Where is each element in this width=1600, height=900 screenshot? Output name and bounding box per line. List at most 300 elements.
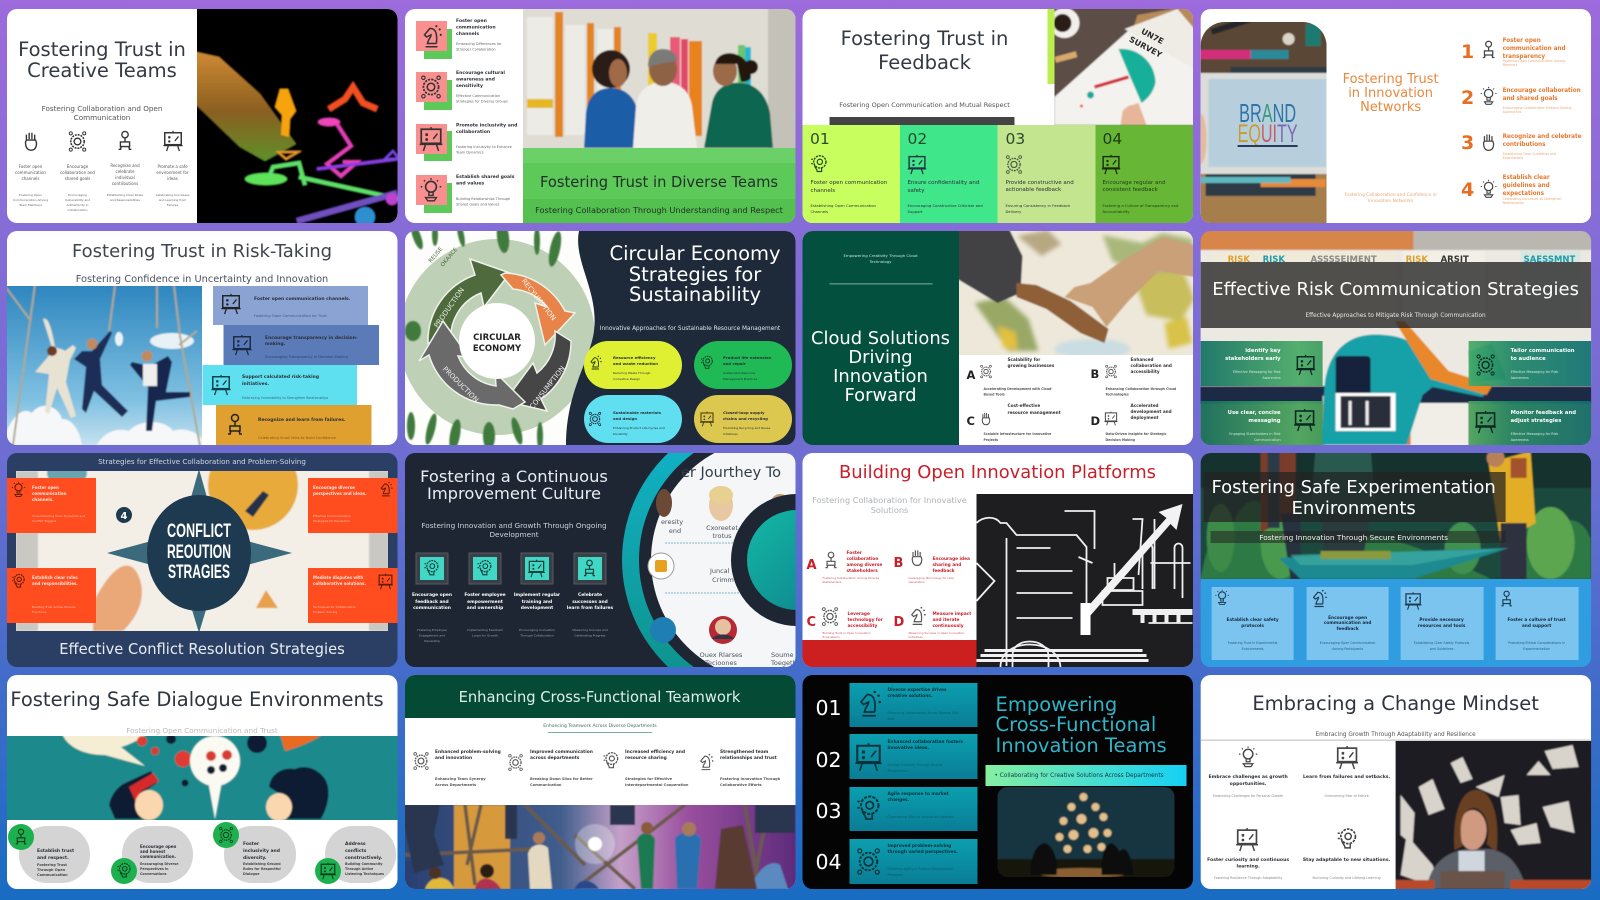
image: conflict resolution compass: CONFLICT [167,521,231,542]
four icon columns: contributions [112,181,138,186]
items A to D: growing businesses [1008,363,1055,368]
title: Feedback [878,51,972,74]
diagram: journey image in ring [622,413,916,707]
step 2: Encouraging Transparency in Decision-Making [265,355,348,359]
box: monitor feedback: adjust strategies [1511,418,1561,424]
pill 3: Sustainable materials [613,410,662,415]
step 3 [202,365,357,405]
items A to D: accessibility [848,623,878,629]
numbered list: communication and [1503,46,1566,52]
box: foster communication: communication [32,491,67,496]
box: diverse perspectives: Effective Communication [313,514,351,518]
numbered column 04: consistent feedback [1102,187,1159,193]
title: Fostering Trust in [18,38,186,61]
items A to D: Cost-effective [1008,403,1040,408]
card 1: Fostering Trust in Experimental [1228,641,1278,645]
image: conflict resolution compass: REOUTION [167,542,231,563]
subtitle [42,106,162,120]
card 2 [1307,587,1389,660]
left green title panel: Technology [869,259,892,264]
pill 2: communication. [140,854,176,859]
numbered column 03: Delivery [1006,209,1022,214]
items A to D: technology for [848,617,884,623]
image: survey on clipboard [1054,9,1193,125]
box: clear roles: Building Trust Across Diverse [32,605,76,609]
diagram: journey image in ring: Soume [771,651,794,659]
subtitle: Fostering Collaboration and Open [42,104,162,113]
step 2: Encourage transparency in decision- [265,335,358,341]
numbered column 02: 02 [908,130,927,148]
pill 1: and respect. [37,855,69,861]
card 3: Establishing Clear Safety Protocols [1414,641,1470,645]
card 4: Foster a culture of trust [1508,617,1566,623]
feature grid: Learn from failures and setbacks. [1303,774,1390,780]
box: mediate disputes [308,568,398,623]
box: mediate disputes: collaborative solutions. [313,581,366,586]
feature columns: and innovation [435,755,472,761]
panel: Fostering Trust in Feedback [802,4,1198,223]
pill 2: Management Practices [723,377,758,381]
feature columns: Breaking Down Silos for Better [530,777,593,781]
subtitle: Fostering Open Communication and Trust [126,726,278,735]
feature columns: Strengthened team [720,749,769,755]
four icon columns: celebrate [116,169,135,174]
diagram: journey image in ring: eresity [661,518,683,526]
items A to D: Enhancing Collaboration through Cloud [1106,387,1177,391]
box: clear messaging [1201,401,1323,445]
box: mediate disputes: Techniques for Collaborative [312,605,356,609]
step columns: Implementing Feedback [467,628,503,632]
step columns [412,553,613,643]
pill 3: Durability [613,432,628,436]
feature grid: Nurturing Curiosity and Lifelong Learning [1313,876,1381,880]
callout strip: • Collaborating for Creative Solutions Across Departments [994,773,1164,779]
header band: Enhancing Cross-Functional Teamwork [459,689,741,706]
step 4: Celebrating Small Wins to Build Confidence [258,436,337,440]
image: risk assessment office [1200,231,1592,445]
feature grid: opportunities. [1230,781,1267,787]
items A to D: stakeholders [846,568,878,574]
box: clear messaging: messaging [1248,418,1281,424]
step columns: Encourage open [412,592,452,598]
items A to D: Projects [984,438,998,442]
panel: Fostering Trust in Diverse Teams [405,4,805,223]
subtitle: Innovative Approaches for Sustainable Resource Management [600,326,781,332]
subtitle: Enhancing Teamwork Across Diverse Departments [543,723,657,729]
item rows [416,18,517,213]
image: survey on clipboard: UN7E [1140,27,1165,46]
numbered column 01: Establishing Open Communication [810,203,877,208]
items A to D: A [806,558,817,573]
step columns: Celebrate [578,592,602,598]
title: Cross-Functional [996,713,1156,736]
box: clear messaging: Communication [1254,438,1281,442]
four icon columns: Fostering Open [19,193,42,197]
pill 3: Foster [243,841,260,847]
box: foster communication: Understanding Team Dynamics and [32,514,85,518]
bottom title: Effective Conflict Resolution Strategies [59,641,345,658]
numbered column 01: Foster open communication [810,180,888,186]
pill 3 [213,822,296,883]
feature columns: Communication [530,783,562,787]
pill 4: Promoting Recycling and Reuse [723,426,770,430]
panel: Empowering Cross-Functional Innovation Teams [802,675,1193,889]
left green title panel: Forward [845,385,916,406]
callout strip [986,765,1186,786]
title: Fostering Trust [1343,72,1439,87]
step 01: Diverse expertise drives [888,687,947,693]
box: tailor communication: Awareness [1511,376,1529,380]
numbered column 02 [900,125,998,223]
header band [405,675,796,718]
title [996,693,1167,757]
left green title panel: Driving [848,347,913,368]
box: foster communication: channels. [32,497,54,502]
card 1 [1212,587,1294,660]
item rows: Fostering Inclusivity to Enhance [456,145,512,149]
item rows: collaboration [456,129,490,135]
numbered list: and shared goals [1503,96,1558,102]
pill 4: Closed-loop supply [723,410,765,415]
item rows: communication [456,24,496,30]
pill 4: constructively. [345,855,383,861]
numbered list: 4 [1461,179,1474,201]
four icon columns: Foster open [19,164,43,169]
items A to D: B [1090,367,1099,381]
card 2: communication and [1324,620,1371,626]
card 2: Encouraging Open Communication [1320,641,1375,645]
pill 3: Establishing Ground [243,862,281,866]
image: brand equity tablet [1200,22,1326,223]
step 03: 03 [816,799,842,823]
diagram: journey image in ring: trotus [712,532,732,540]
pill 3: diversity. [243,855,267,861]
panel: Embracing a Change Mindset [1201,675,1596,895]
four icon columns: Celebrating Successes [156,193,190,197]
image: risk assessment office: ARSIT [1441,255,1469,265]
title [1344,73,1438,111]
card 3: Provide necessary [1419,617,1464,623]
items A to D [966,357,1177,442]
items A to D: Measure impact [932,611,971,617]
diagram: journey image in ring: Tecioones [704,659,737,667]
items A to D: Based Tools [984,392,1005,396]
four icon columns: Vulnerability and [65,198,90,202]
items A to D [806,550,971,639]
diagram: journey image in ring: Crimm [712,576,734,584]
step 03: Agile response to market [888,791,949,797]
step 04 [816,839,978,884]
numbered list [1461,38,1582,205]
items A to D: D [894,615,904,630]
item rows: Shared Goals and Values [456,202,500,206]
box: diverse perspectives: Strategies for Resolution [313,519,350,523]
step 04: 04 [816,850,842,874]
item rows: Embracing Differences for [456,42,502,46]
top caption: Strategies for Effective Collaboration and Problem-Solving [98,457,306,466]
pill 2: Sustainable Resource [723,371,755,375]
numbered column 04 [1096,125,1194,223]
step 02: Enhanced collaboration fosters [888,739,963,745]
step 3: Support calculated risk-taking [242,374,319,380]
panel: Fostering Safe Dialogue Environments [2,675,402,889]
pill 2: Encourage open [140,844,177,849]
items A to D: Initiatives [908,635,923,639]
image: conflict resolution compass: STRAGIES [168,562,230,583]
pill 1: Resource efficiency [613,355,656,360]
feature columns: relationships and trust [720,755,777,761]
step 04: Improved problem-solving [888,843,951,849]
step columns: Foster employee [464,592,506,598]
pill 4: chains and recycling [723,416,768,421]
card 2: Encourage open [1328,615,1367,621]
box: diverse perspectives: Encourage diverse [313,485,355,490]
step columns: communication [413,605,451,611]
numbered column 03 [998,125,1096,223]
items A to D: deployment [1130,415,1159,420]
numbered list: Recognize and celebrate [1503,134,1582,140]
diagram: journey image in ring: Cxoreetet [706,524,738,532]
title: Fostering Trust in Risk-Taking [72,241,332,262]
title: Embracing a Change Mindset [1252,692,1539,715]
numbered column 01: Channels [810,209,828,214]
step columns: development [521,605,553,611]
numbered list: Encourage collaboration [1503,88,1581,94]
item rows: Promote inclusivity and [456,122,517,128]
image: risk assessment office: RISK [1228,255,1250,265]
step 02: innovative ideas. [888,745,929,751]
numbered list: Foster open [1503,38,1541,44]
image: team at wall [523,9,796,148]
numbered list: Approaches [1503,110,1522,114]
items A to D: Fostering Collaboration Among Diverse [822,576,879,580]
image: risk assessment office: SAESSMNT [1524,255,1576,265]
pill 2: Conversations [140,872,167,876]
diagram: journey image in ring: Ouex Rlarses [700,651,743,659]
four icon columns: Establishing Clear Roles [107,193,143,197]
title band [1201,262,1592,328]
numbered column 02: safety [908,188,925,194]
items A to D: Encourage idea [932,556,970,562]
panel: Enhancing Cross-Functional Teamwork [400,675,800,895]
step 2 [224,325,379,365]
box: monitor feedback [1469,401,1592,445]
four icon columns: ideas [167,176,178,181]
step 1: Foster open communication channels. [254,296,351,302]
pill 3: inclusivity and [243,848,280,854]
numbered column 03: 03 [1006,130,1025,148]
four icon columns: and Responsibilities [110,198,140,202]
box: foster communication: Foster open [32,485,59,490]
subtitle: Fostering Open Communication and Mutual Respect [839,101,1010,109]
pill 4 [694,395,792,443]
item rows: Team Dynamics [455,150,484,154]
card 1: Establish clear safety [1227,617,1279,623]
pill 4: conflicts [345,848,367,854]
step 01: 01 [816,696,842,720]
image: conflict resolution compass: 4 [121,511,128,522]
title: Fostering Trust in [841,27,1008,50]
diagram: journey image in ring: end [669,527,681,535]
items A to D: Building Trust in Open Innovation [822,631,871,635]
items A to D: Decision Making [1106,438,1136,442]
step 2: making. [265,341,286,347]
box: clear roles: Functions [32,610,47,614]
image: risk assessment office: RISK [1263,255,1285,265]
panel: Circular Economy Strategies for Sustainability [405,231,796,445]
diagram: leaves and circular economy ring: CONSUMPTION [528,365,567,411]
diagram: leaves and circular economy ring [405,231,594,445]
four icon columns: individual [115,175,135,180]
items A to D: Technologies [1106,392,1129,396]
step 4 [216,405,372,445]
items A to D: Data-Driven Insights for Strategic [1106,432,1167,436]
diagram: leaves and circular economy ring: OKAACE [440,247,459,268]
image: handshake over map [959,231,1193,355]
items A to D: C [966,414,975,428]
item rows: Strategies for Diverse Groups [456,100,508,104]
items A to D: Enhanced [1130,357,1153,362]
title band: Effective Approaches to Mitigate Risk Through Communication [1306,313,1486,319]
numbered list: Establishing Clear Guidelines and [1503,152,1556,156]
four icon columns: Promote a safe [157,164,188,169]
left green title panel: Innovation [833,366,928,387]
items A to D: Stakeholders [822,580,842,584]
subtitle: Solutions [871,505,908,515]
four icon columns: Collaboration [68,208,88,212]
step 03: Overcoming Silos for Innovative Solutions [888,815,954,819]
panel: Effective Risk Communication Strategies [1196,226,1599,454]
item rows: awareness and [456,76,495,82]
box: foster communication: Conflict Triggers [32,519,57,523]
step 1 [213,286,368,325]
feature grid: Embrace challenges as growth [1208,774,1288,780]
pill 1: Reducing Waste Through [613,371,651,375]
items A to D: and iterate [932,617,960,623]
numbered list: Establish clear [1503,175,1550,181]
numbered list: 3 [1461,132,1474,154]
items A to D: Leverage [848,611,870,617]
left green title panel: Empowering Creativity Through Cloud [843,253,918,258]
pill 1 [8,824,90,883]
four icon columns: environment for [156,170,189,175]
title band [1204,472,1506,543]
card 3: and Guidelines [1430,647,1454,651]
panel: Effective Conflict Resolution Strategies [7,440,398,667]
step columns: training and [522,599,552,605]
step columns: Loops for Growth [472,634,498,638]
pill 4: Building Community [345,862,383,866]
step 3: Embracing Vulnerability to Strengthen Relationships [242,396,328,400]
pill 1: Fostering Trust [37,863,67,867]
feature columns: Improved communication [530,749,593,755]
items A to D: Ecosystems [822,635,840,639]
card 1: Environments [1242,647,1264,651]
subtitle: Development [489,530,539,539]
pill 1: Through Open [37,868,66,872]
step columns: feedback and [415,599,449,605]
numbered list: guidelines and [1503,183,1550,189]
title: Strategies for [629,263,762,286]
box: tailor communication: Tailor communication [1511,348,1575,354]
feature columns: Interdepartmental Cooperation [625,783,689,787]
subtitle: Communication [74,113,130,122]
items A to D: Scalable Infrastructure for Innovative [984,432,1051,436]
feature columns: Fostering Innovation Through [720,777,781,781]
subtitle [812,495,967,515]
box: clear messaging: Engaging Stakeholders in Risk [1229,432,1281,436]
panel: Building Open Innovation Platforms [802,453,1198,671]
pill 3: and design [613,416,637,421]
card 2: feedback [1337,626,1359,632]
item rows: Encourage cultural [456,70,505,76]
step columns: Celebrating Progress [574,634,606,638]
items A to D: continuously [932,623,964,629]
pill 4: Initiatives [723,432,738,436]
items A to D: collaboration [846,556,878,562]
numbered list: Relationships [1503,201,1524,205]
subtitle: Innovation Networks [1368,198,1414,204]
items A to D: sharing and [932,562,961,568]
panel: Cloud Solutions Driving Innovation Forward [802,226,1198,445]
feature columns: Enhancing Team Synergy [435,777,486,781]
title band: Fostering Trust in Diverse Teams [540,174,778,191]
image: industrial line art [976,494,1193,667]
title band: Environments [1291,498,1416,519]
pill 3 [584,395,682,443]
box: tailor communication [1469,341,1592,386]
four icon columns: Encouraging [68,193,87,197]
numbered column 02: Ensure confidentiality and [908,180,979,186]
numbered column 03: Provide constructive and [1006,180,1074,186]
items A to D: among diverse [846,562,882,568]
step columns: successes and [572,599,608,605]
box: foster communication [7,478,96,533]
numbered column 03: Ensuring Consistency in Feedback [1006,203,1071,208]
box: monitor feedback: Monitor feedback and [1511,410,1576,416]
pill 1: and waste reduction [613,361,658,366]
numbered list: Expectations [1503,156,1524,160]
step 04: Fostering Agility in Product Development [888,867,954,871]
panel: Fostering a Continuous Improvement Culture [405,413,916,707]
box: tailor communication: Effective Messaging for Risk [1511,370,1558,374]
step 02 [816,734,978,779]
item rows: Building Relationships Through [456,197,510,201]
title band: Fostering Collaboration Through Understanding and Respect [535,205,784,215]
items A to D: A [966,368,976,382]
blue panel [1201,579,1592,667]
box: clear roles: and responsibilities. [32,581,78,586]
step columns: Engagement and [419,634,445,638]
item rows: channels [456,31,479,37]
pill 2 [694,341,792,389]
accent stripe [1048,9,1054,84]
step columns: empowerment [467,599,503,605]
dark bar [830,117,1014,125]
diagram: journey image in ring: Juncal C [709,567,737,575]
items A to D: C [806,615,816,630]
four icon columns: collaboration and [60,170,95,175]
image: neon hand [197,9,398,223]
pill 3: Rules for Respectful [243,867,281,871]
pill 2: and honest [140,849,165,854]
subtitle: Embracing Growth Through Adaptability and Resilience [1315,732,1476,738]
feature columns: resource sharing [625,755,667,761]
numbered list: expectations [1503,191,1545,197]
panel: Fostering Trust in Innovation Networks [1195,9,1591,229]
diagram: leaves and circular economy ring: REUSE [428,246,445,264]
four icon columns [13,131,190,212]
